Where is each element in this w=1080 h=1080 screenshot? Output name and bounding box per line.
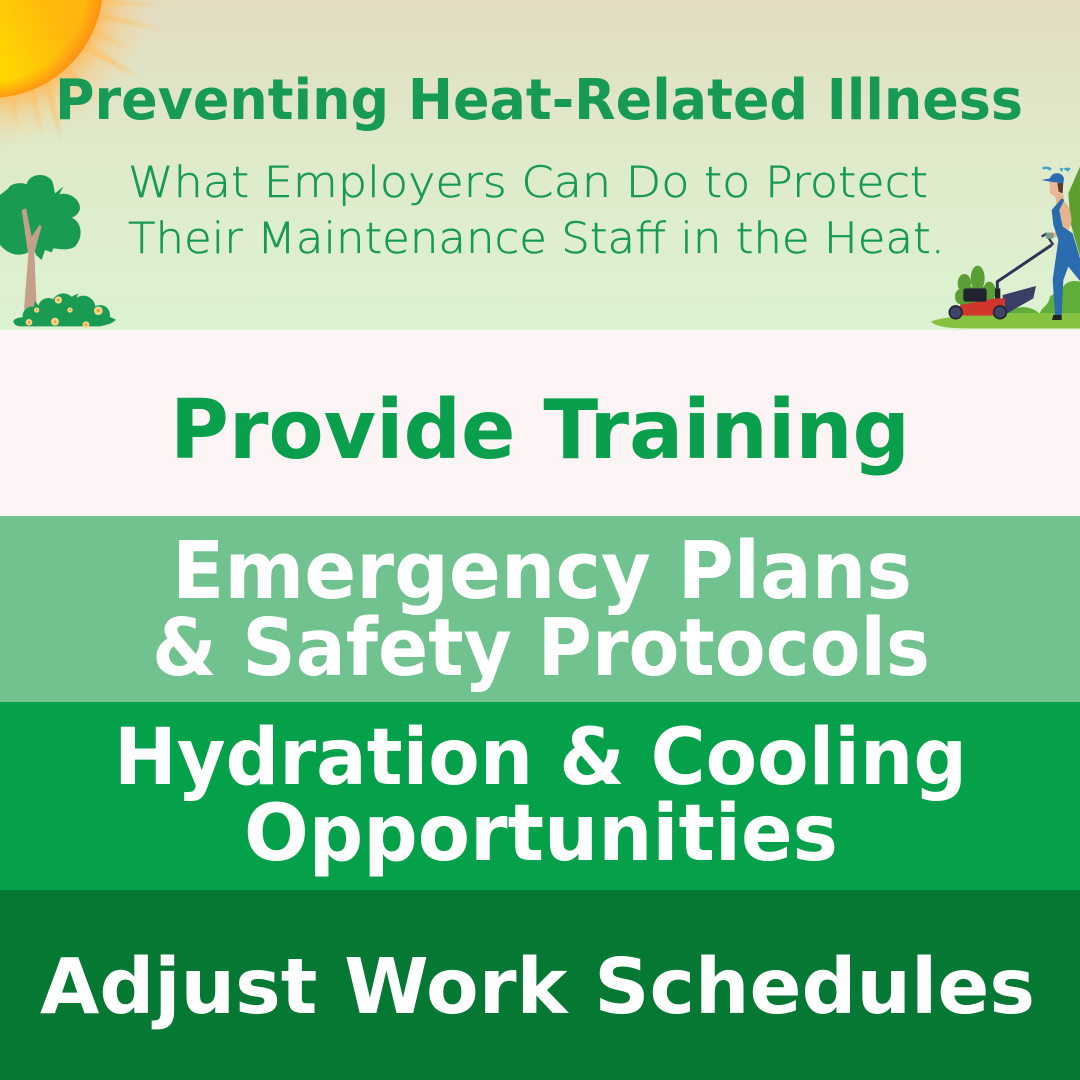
- heading: hydration: Opportunities: [244, 789, 838, 879]
- heading: adjust work schedules: Adjust Work Schedules: [40, 943, 1035, 1032]
- cap: [1041, 173, 1064, 183]
- heading: emergency plans: & Safety Protocols: [152, 602, 930, 694]
- panel: hydration: [0, 702, 1080, 890]
- arm and chest: [1052, 201, 1072, 238]
- heading: hydration: [114, 713, 967, 879]
- overalls: [1052, 198, 1080, 315]
- boot: [1052, 315, 1062, 320]
- head: [1049, 182, 1063, 197]
- panel: emergency plans: [0, 516, 1080, 702]
- title: Preventing Heat-Related Illness: [55, 68, 1023, 133]
- subtitle: [128, 158, 945, 264]
- glove: [1046, 233, 1054, 239]
- plant: [955, 266, 996, 305]
- heading: provide training: Provide Training: [170, 383, 910, 478]
- subtitle: What Employers Can Do to Protect: [128, 158, 928, 208]
- panel: adjust work schedules: [0, 890, 1080, 1080]
- icon: lawn mower and grass: [931, 167, 1080, 328]
- icon: gardener: [1041, 166, 1080, 320]
- hedge behind man: [1068, 167, 1080, 257]
- body: [960, 298, 1005, 316]
- panel: header background: [0, 0, 1080, 330]
- heading: emergency plans: Emergency Plans: [172, 525, 912, 617]
- icon: flowering bush: [13, 293, 116, 328]
- icon: tree: [0, 175, 81, 309]
- handle: [997, 245, 1052, 288]
- subtitle: Their Maintenance Staff in the Heat.: [128, 214, 945, 264]
- panel: provide training: [0, 330, 1080, 516]
- grass: [931, 313, 1080, 328]
- deck: [1003, 286, 1036, 313]
- sweat drops: [1042, 166, 1071, 172]
- icon: sun: [0, 0, 165, 150]
- heading: hydration: Hydration & Cooling: [114, 713, 967, 803]
- heading: emergency plans: [152, 525, 930, 694]
